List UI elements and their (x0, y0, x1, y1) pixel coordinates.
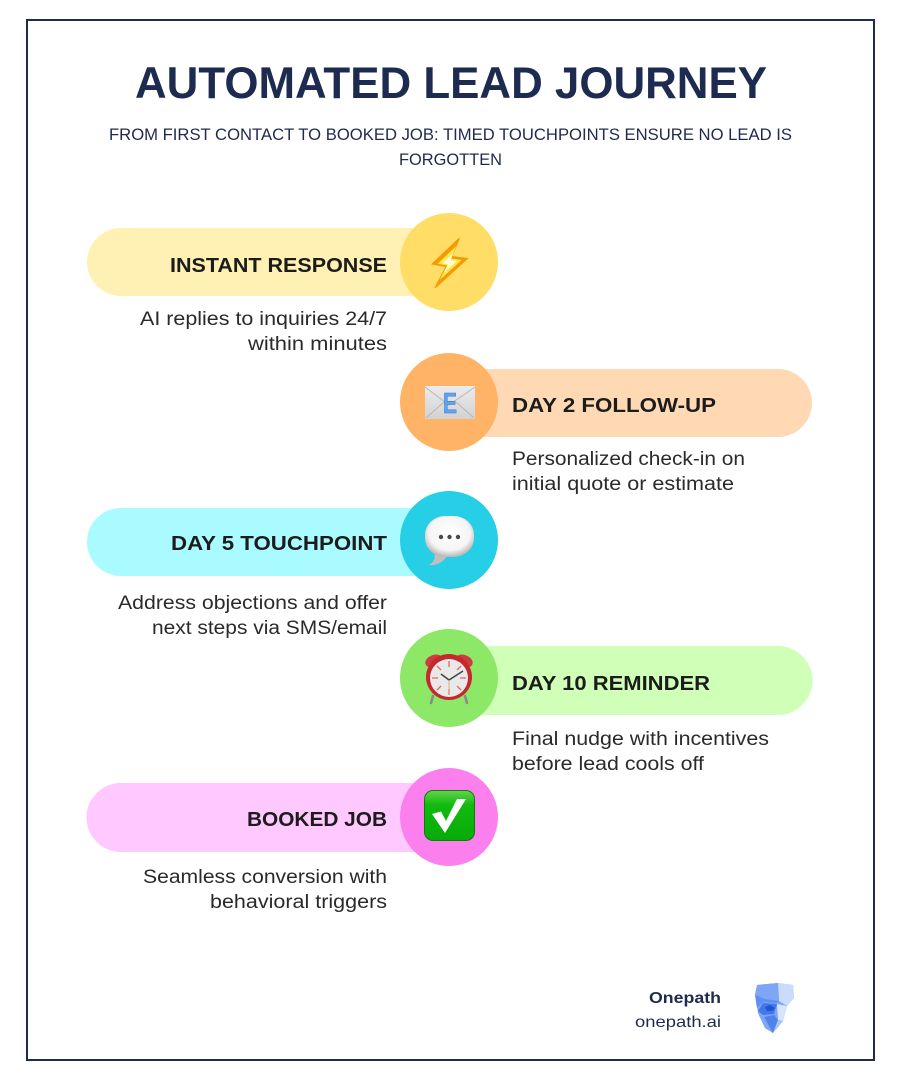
heading: day 10 reminder: DAY 10 REMINDER (512, 672, 710, 695)
circle: day 5 touchpoint (400, 491, 498, 589)
description: day 2 follow-up: Personalized check-in on (512, 449, 745, 470)
description: day 5 touchpoint (118, 593, 388, 639)
description: instant response: AI replies to inquiries 24/7 (140, 309, 387, 330)
heading: day 2 follow-up: DAY 2 FOLLOW-UP (512, 394, 716, 417)
circle: day 2 follow-up (400, 353, 498, 451)
circle: booked job (400, 768, 498, 866)
description: booked job: behavioral triggers (210, 892, 387, 913)
step 2: day 2 follow-up (400, 353, 812, 495)
icon: alarm clock (423, 652, 475, 703)
description: instant response (140, 309, 387, 355)
icon: onepath logo (755, 983, 794, 1033)
subtitle: FORGOTTEN (399, 151, 502, 169)
circle: instant response (400, 213, 498, 311)
icon: envelope: E (443, 388, 457, 420)
heading: booked job: BOOKED JOB (247, 808, 387, 831)
step 3: day 5 touchpoint (87, 491, 498, 639)
pill: day 10 reminder (450, 646, 813, 715)
description: booked job (143, 867, 387, 913)
description: instant response: within minutes (247, 334, 387, 355)
footer brand text: Onepath (649, 990, 721, 1007)
title: AUTOMATED LEAD JOURNEY (135, 59, 767, 108)
step 1: instant response (87, 213, 498, 355)
description: day 5 touchpoint: next steps via SMS/email (152, 618, 387, 639)
footer brand text: onepath.ai (635, 1014, 721, 1031)
subtitle: FROM FIRST CONTACT TO BOOKED JOB: TIMED TOUCHPOINTS ENSURE NO LEAD IS (109, 126, 792, 144)
description: day 5 touchpoint: Address objections and offer (118, 593, 388, 614)
description: day 10 reminder: before lead cools off (512, 754, 705, 775)
subtitle (109, 126, 792, 169)
icon: check mark (424, 790, 475, 841)
pill: day 5 touchpoint (87, 508, 450, 576)
icon: speech bubble (425, 516, 474, 565)
step 4: day 10 reminder (400, 629, 813, 775)
pill: instant response (87, 228, 450, 296)
footer brand text (635, 990, 721, 1031)
step 5: booked job (87, 768, 498, 913)
icon: lightning bolt (432, 238, 468, 288)
circle: day 10 reminder (400, 629, 498, 727)
description: day 2 follow-up (512, 449, 745, 495)
icon: envelope (425, 386, 475, 420)
description: day 10 reminder: Final nudge with incentives (512, 729, 769, 750)
description: day 10 reminder (512, 729, 769, 775)
description: day 2 follow-up: initial quote or estimate (512, 474, 734, 495)
heading: day 5 touchpoint: DAY 5 TOUCHPOINT (171, 532, 388, 555)
heading: instant response: INSTANT RESPONSE (170, 254, 387, 277)
pill: day 2 follow-up (450, 369, 812, 437)
pill: booked job (87, 783, 450, 852)
description: booked job: Seamless conversion with (143, 867, 387, 888)
